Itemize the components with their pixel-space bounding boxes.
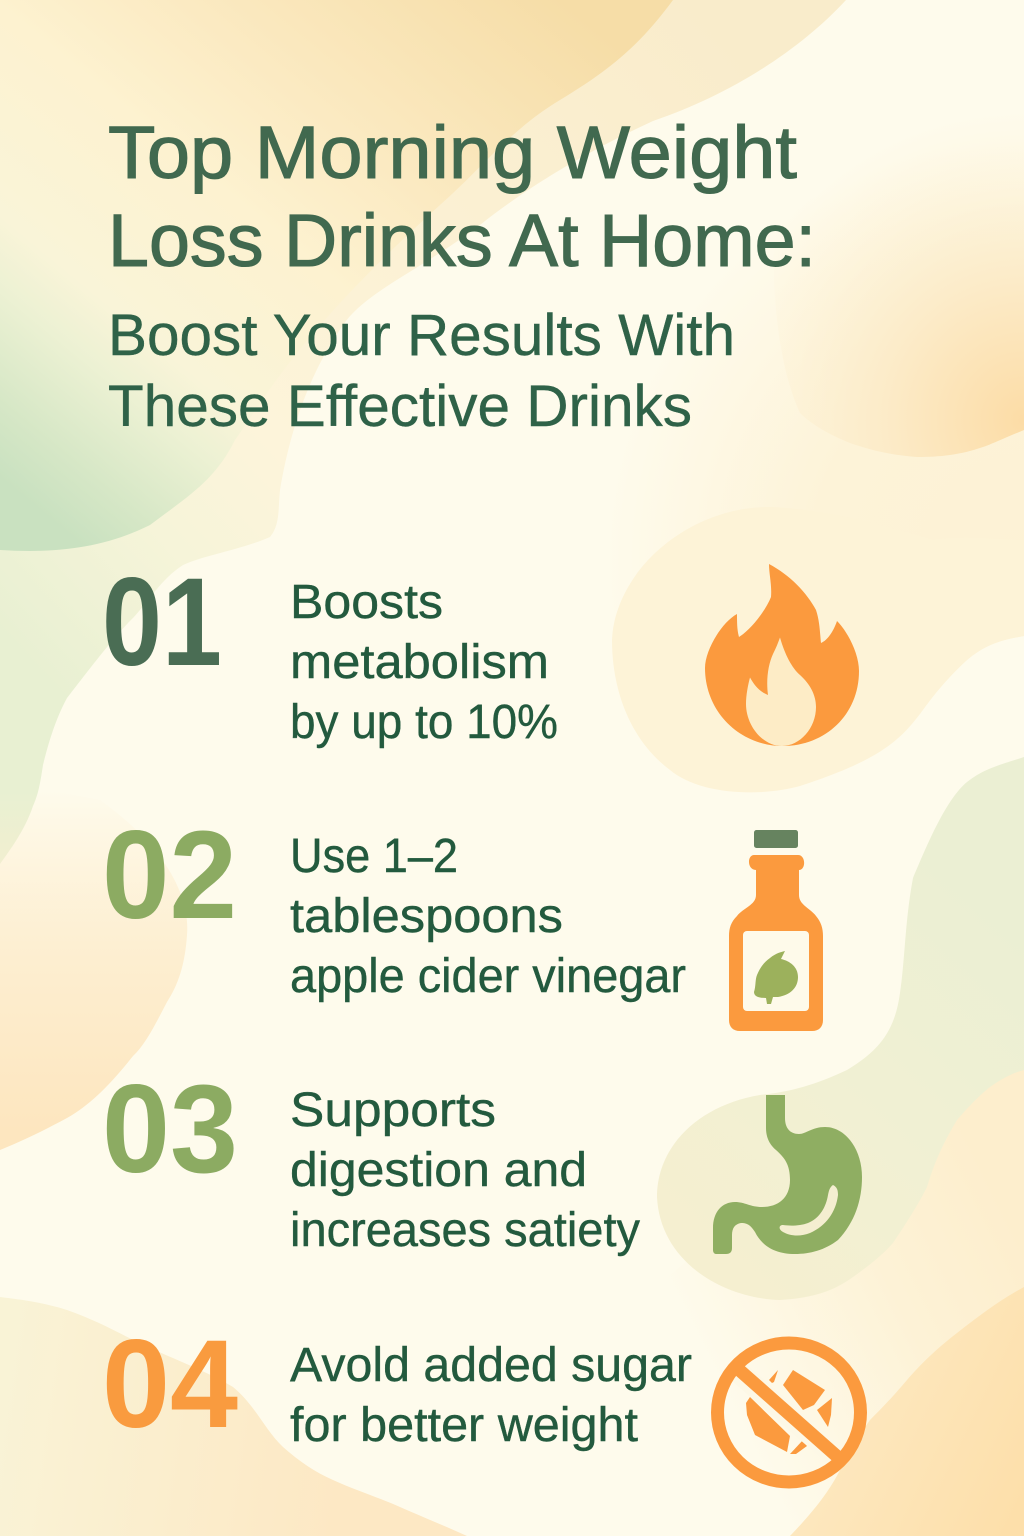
title — [108, 111, 816, 282]
number 03: 03 — [102, 1060, 238, 1199]
number 02: 02 — [102, 806, 237, 945]
text: apple cider vinegar dose — [290, 830, 686, 1003]
subtitle — [108, 303, 735, 439]
icon: vinegar bottle — [729, 830, 823, 1031]
subtitle: Boost Your Results With — [108, 303, 735, 368]
text: digestion and satiety — [290, 1084, 640, 1257]
text: boosts metabolism — [290, 576, 558, 749]
item 04 — [102, 1315, 860, 1482]
text: digestion and satiety: Supports — [290, 1084, 496, 1137]
panel: right green shape and stomach backdrop — [657, 757, 1024, 1300]
number 04: 04 — [102, 1315, 238, 1454]
text: boosts metabolism: metabolism — [290, 636, 549, 689]
text: apple cider vinegar dose: tablespoons — [290, 890, 563, 943]
text: avoid added sugar: Avold added sugar — [290, 1339, 692, 1392]
item 03 — [102, 1060, 862, 1257]
text: boosts metabolism: Boosts — [290, 576, 443, 629]
text: avoid added sugar: for better weight — [290, 1399, 638, 1452]
item 01 — [102, 553, 859, 749]
icon: no sugar — [718, 1343, 860, 1482]
text: boosts metabolism: by up to 10% — [290, 696, 558, 749]
text: avoid added sugar — [290, 1339, 692, 1452]
text: digestion and satiety: digestion and — [290, 1144, 587, 1197]
title: Top Morning Weight — [108, 111, 797, 194]
item 02 — [102, 806, 823, 1031]
number 01: 01 — [102, 553, 222, 692]
text: apple cider vinegar dose: apple cider vinegar — [290, 950, 686, 1003]
text: apple cider vinegar dose: Use 1–2 — [290, 830, 458, 883]
subtitle: These Effective Drinks — [108, 374, 692, 439]
text: digestion and satiety: increases satiety — [290, 1204, 640, 1257]
title: Loss Drinks At Home: — [108, 199, 816, 282]
icon: flame — [705, 564, 859, 746]
icon: stomach — [713, 1095, 862, 1254]
